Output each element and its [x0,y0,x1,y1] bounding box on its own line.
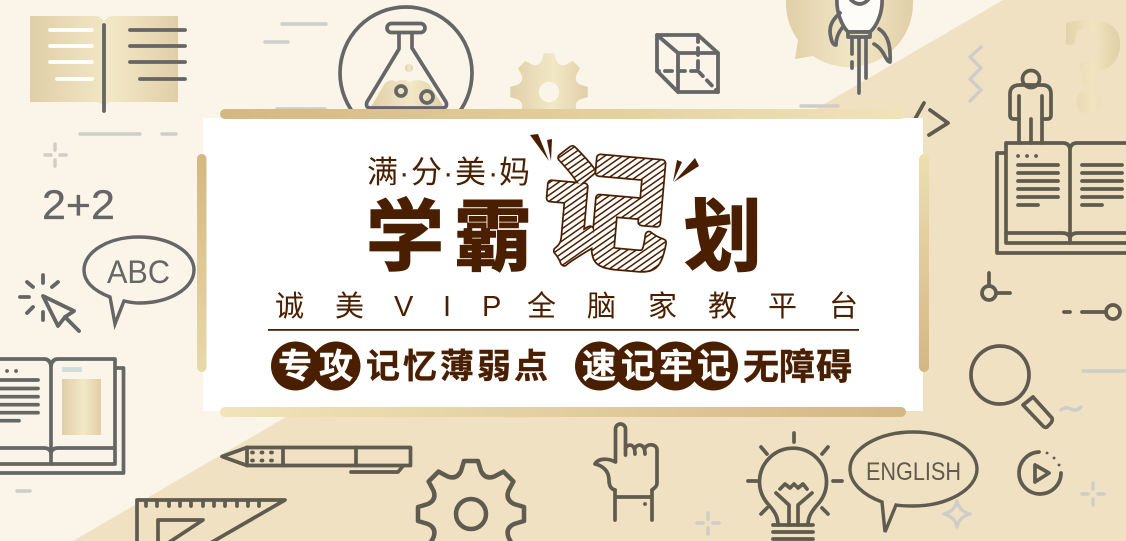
icon: connector nodes [982,273,1120,319]
title: 划: 划 [684,175,762,287]
icon: rocket with gold bubble [786,0,913,93]
icon: set square ruler [137,500,285,541]
icon: person standing on book [1010,70,1051,143]
title: 学霸: 学霸 [366,175,532,287]
text: 2+2: 2+2 [42,181,115,228]
icon: open book right [997,143,1126,253]
icon: flask in circle [340,7,472,139]
icon: light bulb [748,433,842,539]
accent rays around 记 [530,134,699,182]
frame bar: right [919,154,929,372]
icon: code bracket [915,103,948,135]
icon: magnifier [971,346,1052,427]
badge: 速记牢记: 速记牢记 [582,339,731,388]
panel: white title card [197,109,929,417]
tagline: 诚美VIP全脑家教平台: 诚美VIP全脑家教平台 [275,290,858,323]
icon: pencil [222,448,410,472]
frame bar: top [220,109,906,119]
icon: cursor click [20,275,79,331]
icon: open book left bottom [0,359,124,473]
badge: 专攻: 专攻 [278,339,353,388]
icon: gold gear top [510,53,588,131]
icon: play button [1019,452,1061,494]
icon: ENGLISH speech bubble: ENGLISH [866,458,961,486]
icon: ABC speech bubble: ABC [107,254,170,290]
title: hand-drawn 记: 记 [539,140,674,288]
icon: gear bottom [418,461,524,541]
frame bar: bottom [220,407,906,417]
text: 无障碍: 无障碍 [743,338,852,390]
icon: cube [657,35,718,92]
title: hand-drawn 记: 记 [539,140,674,288]
icon: ABC speech bubble [84,237,194,324]
icon: open book top left [30,16,185,111]
subtitle: 满分美妈: 满·分·美·妈 [367,155,530,190]
icon: pointing hand [595,424,657,520]
icon: ENGLISH speech bubble [850,432,977,532]
divider line [268,329,859,331]
text: 记忆薄弱点: 记忆薄弱点 [366,339,548,388]
frame bar: left [197,154,206,372]
